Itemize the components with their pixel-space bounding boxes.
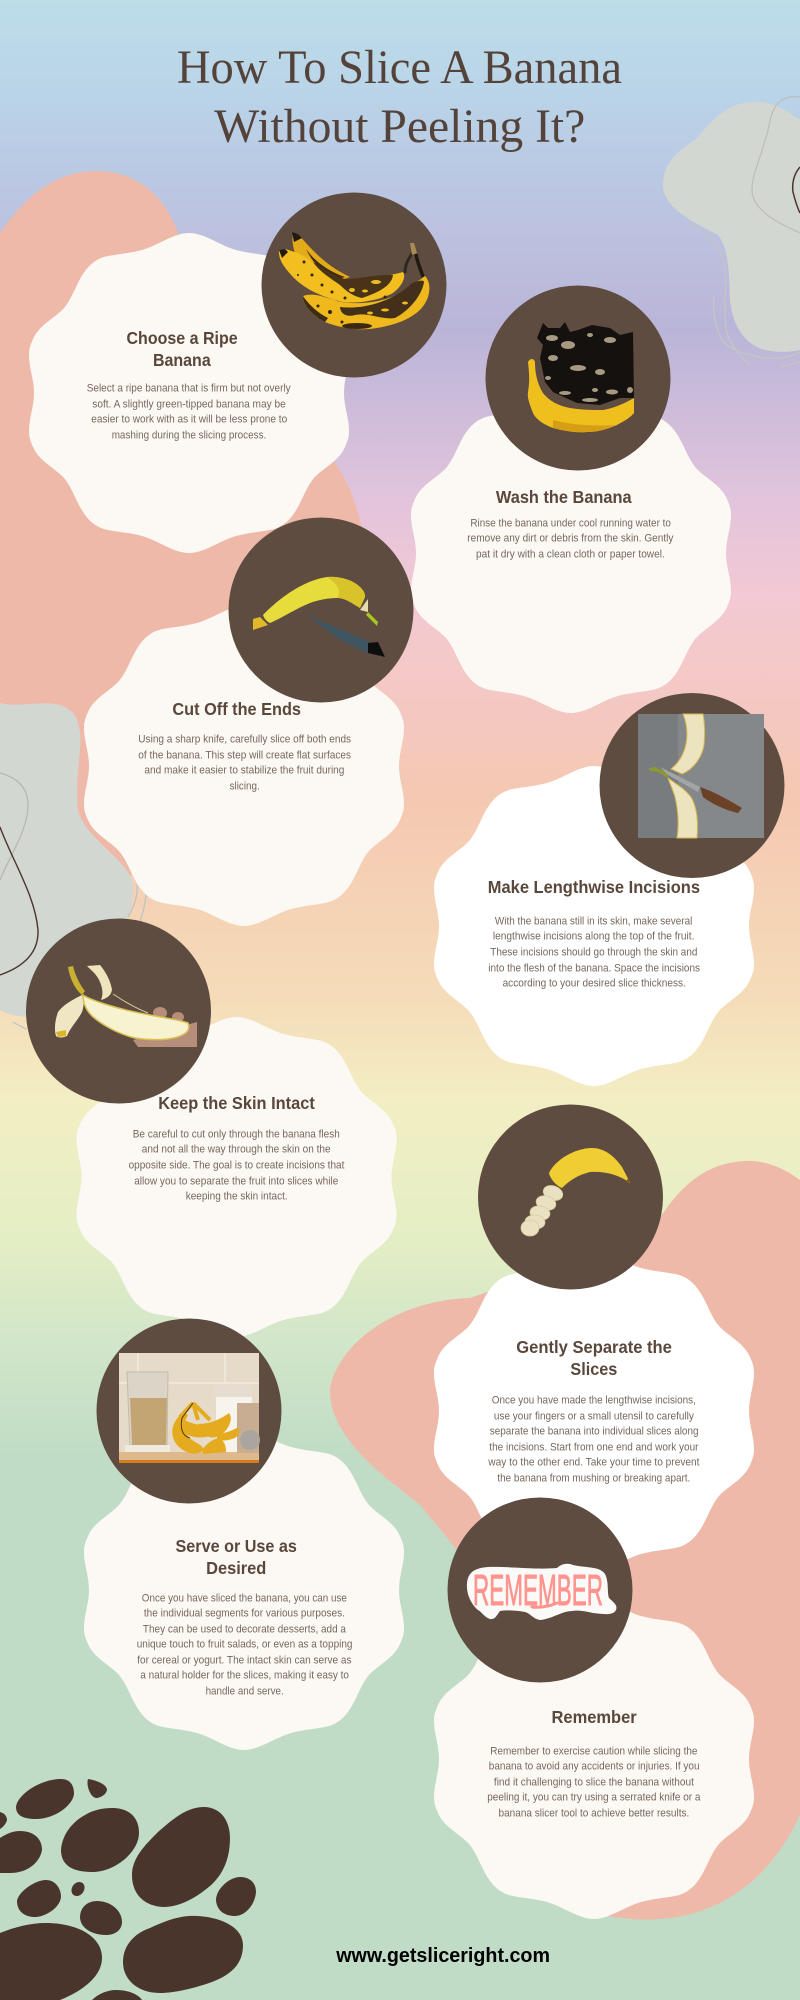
body text: into the flesh of the banana. Space the incisions [488, 962, 700, 974]
title: Without Peeling It? [214, 100, 585, 153]
image circle with sliced banana [478, 1104, 663, 1290]
body text: Select a ripe banana that is firm but not overly [87, 382, 291, 394]
body text [487, 1394, 700, 1484]
image circle with banana and knife [228, 518, 414, 702]
body text: Remember to exercise caution while slicing the [490, 1746, 697, 1758]
image circle with remember sticker: REMEMBER [473, 1566, 603, 1615]
body text: keeping the skin intact. [186, 1190, 288, 1202]
heading: Gently Separate the [516, 1337, 672, 1357]
body text: and make it easier to stabilize the fruit during [144, 764, 344, 776]
body text [467, 518, 674, 560]
body text: find it challenging to slice the banana without [494, 1776, 694, 1788]
image circle with kitchen photo [96, 1318, 282, 1504]
image circle with halved banana photo [600, 693, 784, 878]
heading: Banana [153, 350, 211, 370]
card shape [29, 233, 349, 553]
decorative salmon blob: lower right [330, 1161, 800, 1920]
body text: They can be used to decorate desserts, add a [143, 1624, 347, 1636]
heading [176, 1536, 297, 1578]
heading: Keep the Skin Intact [158, 1093, 315, 1113]
decorative salmon blob: upper left [0, 171, 364, 880]
body text [129, 1128, 344, 1202]
body text: use your fingers or a small utensil to carefully [494, 1410, 694, 1422]
card shape [84, 606, 404, 926]
body text: allow you to separate the fruit into slices while [134, 1176, 338, 1188]
body text: peeling it, you can try using a serrated knife or a [487, 1792, 701, 1804]
website url: www.getsliceright.com [335, 1945, 550, 1967]
body text: pat it dry with a clean cloth or paper towel. [476, 548, 665, 560]
body text: a natural holder for the slices, making it easy to [140, 1670, 349, 1682]
body text: soft. A slightly green-tipped banana may be [92, 398, 286, 410]
body text: separate the banana into individual slices along [490, 1426, 698, 1438]
step 7: serve or use as desired [84, 1318, 404, 1750]
body text: Once you have made the lengthwise incisions, [492, 1394, 696, 1406]
heading: Cut Off the Ends [172, 699, 301, 719]
body text: easier to work with as it will be less prone to [91, 414, 287, 426]
heading: Slices [570, 1359, 618, 1379]
decorative grey blob with lines: upper right [663, 97, 800, 367]
step 6: gently separate the slices [434, 1104, 754, 1571]
body text: way to the other end. Take your time to prevent [487, 1456, 700, 1468]
step 5: keep the skin intact [26, 918, 396, 1337]
body text: Be careful to cut only through the banana flesh [133, 1128, 340, 1140]
body text: banana slicer tool to achieve better results. [498, 1808, 689, 1820]
body text: according to your desired slice thickness. [503, 978, 686, 990]
heading: Serve or Use as [176, 1536, 297, 1556]
card shape [411, 393, 731, 713]
body text: opposite side. The goal is to create incisions that [129, 1160, 344, 1172]
heading: Remember [552, 1707, 637, 1727]
body text: unique touch to fruit salads, or even as a topping [137, 1638, 352, 1650]
card shape [84, 1430, 404, 1750]
body text: for cereal or yogurt. The intact skin can serve as [137, 1654, 352, 1666]
body text: and not all the way through the skin on the [142, 1144, 331, 1156]
body text: slicing. [230, 780, 260, 792]
card shape [76, 1017, 396, 1337]
body text: the incisions. Start from one end and work your [489, 1442, 699, 1454]
heading: Make Lengthwise Incisions [488, 877, 700, 897]
decorative grey blob with lines: left [0, 703, 146, 1029]
body text: These incisions should go through the skin and [490, 946, 697, 958]
body text: mashing during the slicing process. [112, 430, 266, 442]
body text [137, 1592, 352, 1698]
card shape [434, 1251, 754, 1571]
body text: lengthwise incisions along the top of the fruit. [493, 930, 694, 942]
heading: Desired [206, 1558, 266, 1578]
body text: of the banana. This step will create flat surfaces [138, 750, 352, 762]
decorative dark pebbles: bottom left [0, 1779, 256, 2000]
heading [516, 1337, 672, 1379]
step 1: choose a ripe banana [29, 192, 446, 553]
title [177, 41, 622, 153]
body text [138, 734, 352, 792]
body text: With the banana still in its skin, make several [495, 916, 692, 928]
step 2: wash the banana [411, 286, 731, 713]
heading: Wash the Banana [496, 487, 632, 507]
step 3: cut off the ends [84, 518, 414, 926]
body text [487, 1746, 701, 1820]
image circle with peeled banana in hand [26, 918, 211, 1104]
body text: handle and serve. [206, 1686, 284, 1698]
image circle with banana under water [486, 286, 670, 470]
heading [126, 328, 238, 370]
body text [488, 916, 700, 990]
step 4: make lengthwise incisions [434, 693, 784, 1086]
step 8: remember [434, 1498, 754, 1919]
title: How To Slice A Banana [177, 41, 622, 94]
heading: Choose a Ripe [126, 328, 238, 348]
body text: the banana from mushing or breaking apart. [497, 1472, 690, 1484]
body text: banana to avoid any accidents or injuries. If you [489, 1760, 700, 1772]
body text [87, 382, 291, 442]
body text: remove any dirt or debris from the skin. Gently [467, 532, 674, 544]
card shape [434, 766, 754, 1086]
body text: Using a sharp knife, carefully slice off both ends [138, 734, 352, 746]
body text: Once you have sliced the banana, you can use [142, 1592, 347, 1604]
body text: Rinse the banana under cool running water to [470, 518, 671, 530]
image circle with spotted bananas [262, 192, 446, 378]
image circle with remember sticker [448, 1498, 632, 1682]
body text: the individual segments for various purposes. [144, 1608, 345, 1620]
card shape [434, 1599, 754, 1919]
